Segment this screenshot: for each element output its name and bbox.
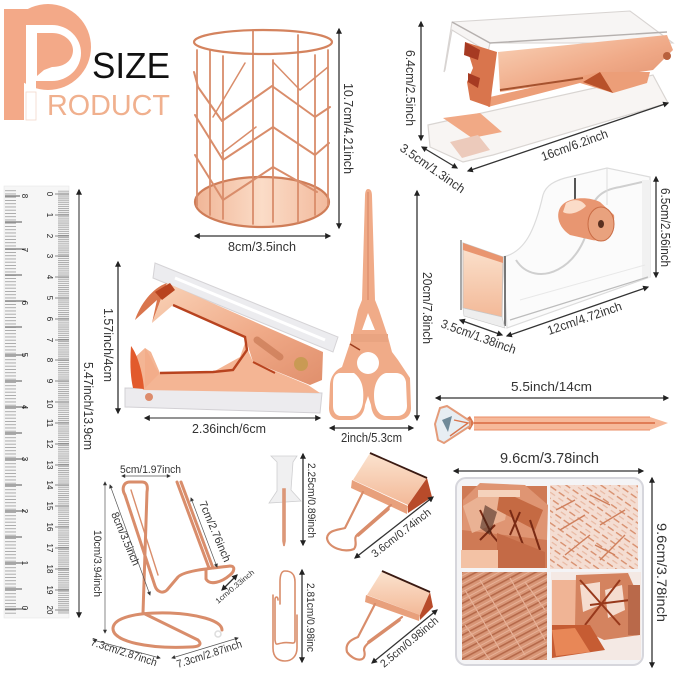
panel: ruler: 5 [45, 296, 54, 301]
dimension: paper clip height: 2.81cm/0.98inc [304, 583, 316, 652]
panel: ruler: 9 [45, 379, 54, 384]
dimension: stapler depth: 3.5cm/1.3inch [397, 141, 468, 196]
icon: wire phone stand [113, 482, 234, 647]
compartment: mixed clips [551, 572, 641, 660]
compartment: push pins [550, 485, 638, 569]
logo: big P mark [4, 4, 91, 120]
icon: small binder clip [347, 571, 433, 660]
dimension: stand height: 10cm/3.94inch [91, 530, 103, 597]
compartment: binder clips [461, 483, 548, 568]
icon: tape dispenser [461, 168, 650, 328]
dimension: large clip: 3.6cm/0.74inch [369, 507, 434, 560]
dimension: stand top width: 5cm/1.97inch [120, 464, 181, 476]
panel: ruler: 1 [20, 561, 29, 566]
panel: ruler: 0 [45, 192, 54, 197]
panel: ruler: 6 [20, 301, 29, 306]
panel: ruler: 14 [45, 481, 54, 490]
panel: ruler: 6 [45, 317, 54, 322]
dimension: pen length: 5.5inch/14cm [511, 380, 592, 394]
dimension: tape depth: 3.5cm/1.38inch [439, 317, 518, 357]
panel: ruler: 2 [20, 509, 29, 514]
panel: ruler: 4 [20, 405, 29, 410]
panel: ruler: 8 [20, 194, 29, 199]
panel: ruler: 13 [45, 461, 54, 470]
dimension: stand lip: 1cm/0.33inch [214, 568, 256, 606]
panel: ruler: 7 [45, 338, 54, 343]
panel: ruler: 3 [45, 254, 54, 259]
compartment: paper clips [462, 572, 547, 660]
panel: ruler: 11 [45, 419, 54, 428]
heading: PRODUCT: RODUCT [47, 90, 170, 122]
dimension: cup width [195, 236, 330, 254]
panel: ruler: 10 [45, 400, 54, 409]
panel: ruler: 1 [45, 213, 54, 218]
panel: ruler: 8 [45, 358, 54, 363]
dimension: stapler length: 16cm/6.2inch [539, 127, 610, 164]
panel: ruler: 18 [45, 565, 54, 574]
heading: SIZE: SIZE [92, 45, 170, 86]
dimension: pin height: 2.25cm/0.89inch [305, 463, 317, 538]
dimension: tape length: 12cm/4.72inch [545, 299, 624, 338]
dimension: stapler height: 6.4cm/2.5inch [403, 50, 417, 126]
icon: Eiffel tower scissors [329, 189, 411, 420]
panel: ruler: 16 [45, 523, 54, 532]
panel: ruler: 3 [20, 457, 29, 462]
panel: ruler [4, 186, 69, 618]
dimension: stapler height [403, 22, 421, 140]
panel: ruler: 12 [45, 440, 54, 449]
dimension: stand back length [108, 485, 150, 595]
dimension: scissors width: 2inch/5.3cm [341, 431, 402, 445]
panel: ruler: 15 [45, 502, 54, 511]
dimension: small clip: 2.5cm/0.98inch [378, 615, 441, 670]
icon: diamond pen [435, 406, 668, 443]
dimension: tape length [507, 287, 648, 338]
panel: ruler: 19 [45, 586, 54, 595]
panel: ruler: 4 [45, 275, 54, 280]
dimension: stand base right: 7.3cm/2.87inch [175, 638, 244, 671]
icon: stapler [428, 11, 673, 162]
panel: ruler: 7 [20, 248, 29, 253]
dimension: remover width: 2.36inch/6cm [192, 422, 266, 436]
dimension: stand back length: 8cm/3.5inch [108, 510, 142, 568]
icon: wire pencil cup [194, 30, 332, 227]
dimension: scissors width [330, 428, 413, 445]
dimension: stand front length: 7cm/2.76inch [196, 499, 233, 564]
dimension: scissors height: 20cm/7.8inch [420, 272, 434, 344]
dimension: organizer height: 9.6cm/3.78inch [654, 523, 670, 622]
dimension: organizer width: 9.6cm/3.78inch [500, 451, 599, 467]
icon: push pin [269, 456, 301, 546]
dimension: tape height: 6.5cm/2.56inch [658, 188, 672, 267]
dimension: stapler length [468, 103, 668, 171]
icon: large binder clip [327, 453, 432, 550]
panel: ruler: 17 [45, 544, 54, 553]
dimension: stand base left: 7.3cm/2.87inch [89, 636, 158, 669]
dimension: cup height: 10.7cm/4.21inch [341, 83, 355, 174]
panel: ruler: 20 [45, 606, 54, 615]
dimension: paper clip height [302, 570, 316, 662]
panel: ruler: 2 [45, 234, 54, 239]
dimension: remover height: 1.57inch/4cm [101, 308, 115, 382]
dimension: ruler length: 5.47inch/13.9cm [81, 362, 95, 450]
panel: organizer box of clips [456, 478, 643, 665]
dimension: large clip [355, 497, 434, 560]
panel: ruler: 5 [20, 353, 29, 358]
icon: staple remover [125, 263, 338, 413]
dimension: cup width: 8cm/3.5inch [228, 240, 296, 254]
panel: ruler: 0 [20, 606, 29, 611]
icon: paper clip [273, 571, 297, 661]
